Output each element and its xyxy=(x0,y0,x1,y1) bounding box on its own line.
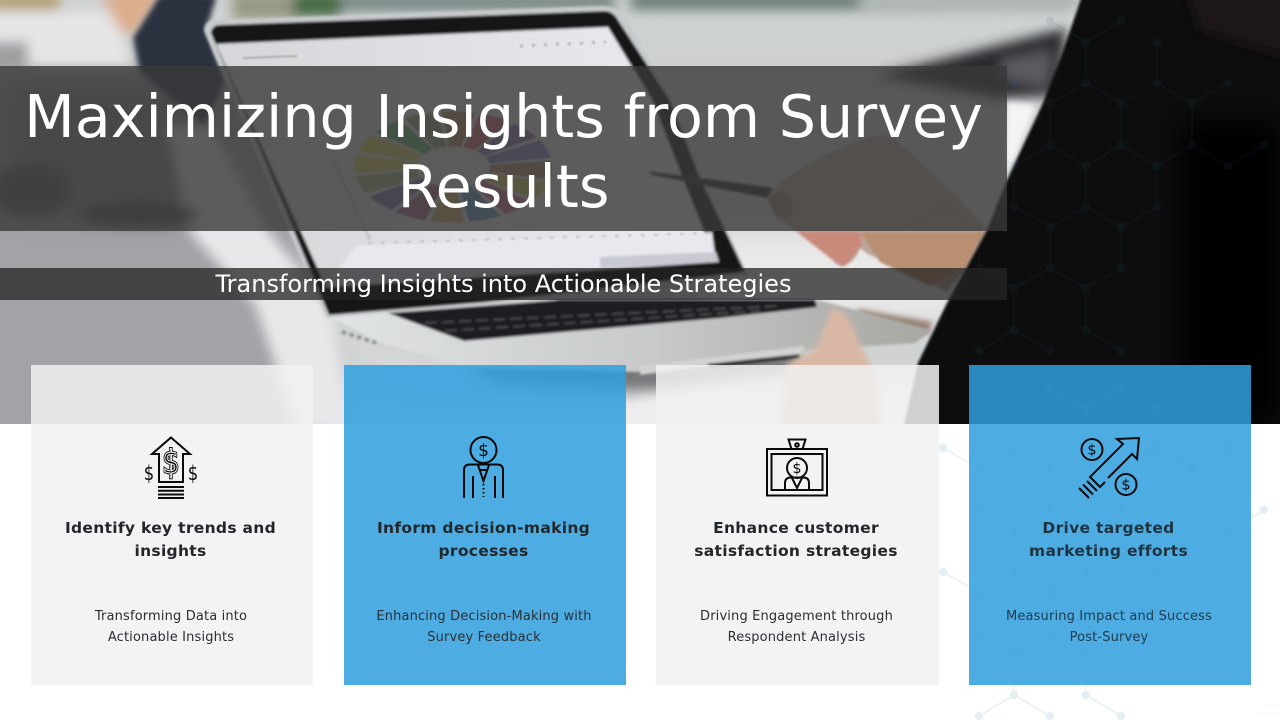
panel: inform decision-making xyxy=(344,365,626,685)
panel: identify key trends xyxy=(30,365,313,685)
description xyxy=(700,609,893,645)
description xyxy=(1006,609,1212,645)
icon: id badge with dollar head xyxy=(766,438,828,496)
description xyxy=(376,609,592,645)
subtitle text: Transforming Insights into Actionable Strategies xyxy=(216,270,791,298)
background photo: laptop with survey chart xyxy=(0,0,1280,424)
description: Respondent Analysis xyxy=(728,630,865,645)
icon: house arrow with dollars xyxy=(143,436,198,499)
panel: enhance customer satisfaction xyxy=(656,365,938,685)
title text: Maximizing Insights from Survey xyxy=(24,82,983,150)
title text xyxy=(24,82,983,220)
description: Actionable Insights xyxy=(108,630,234,645)
description: Survey Feedback xyxy=(427,630,541,645)
icon: house arrow with dollars: $ xyxy=(162,443,179,481)
panel: drive targeted marketing xyxy=(968,365,1251,685)
heading: marketing efforts xyxy=(1029,542,1188,560)
heading: Identify key trends and insights xyxy=(65,519,276,560)
description: Enhancing Decision-Making with xyxy=(376,609,592,624)
heading xyxy=(1029,519,1188,560)
icon: id badge with dollar head: $ xyxy=(792,461,802,477)
description: Measuring Impact and Success xyxy=(1006,609,1212,624)
icon: rising arrow with coins: $ xyxy=(1087,442,1096,458)
description: Driving Engagement through xyxy=(700,609,893,624)
icon: house arrow with dollars: $ xyxy=(143,463,154,485)
icon: rising arrow with coins xyxy=(1078,437,1140,499)
icon: businessman with dollar head: $ xyxy=(478,441,488,461)
title banner xyxy=(0,66,1007,231)
icon: house arrow with dollars: $ xyxy=(187,463,198,485)
subtitle banner xyxy=(0,268,1007,300)
description xyxy=(94,609,247,645)
heading: Inform decision-making processes xyxy=(377,519,590,560)
heading: Enhance customer satisfaction strategies xyxy=(694,519,898,560)
icon: house arrow with dollars: $ xyxy=(162,443,179,481)
description: Transforming Data into xyxy=(95,609,247,624)
title text: Results xyxy=(398,152,609,220)
heading: Drive targeted xyxy=(1042,519,1175,537)
icon: rising arrow with coins: $ xyxy=(1121,478,1130,494)
description: Post-Survey xyxy=(1070,630,1148,645)
icon: businessman with dollar head xyxy=(463,436,504,498)
